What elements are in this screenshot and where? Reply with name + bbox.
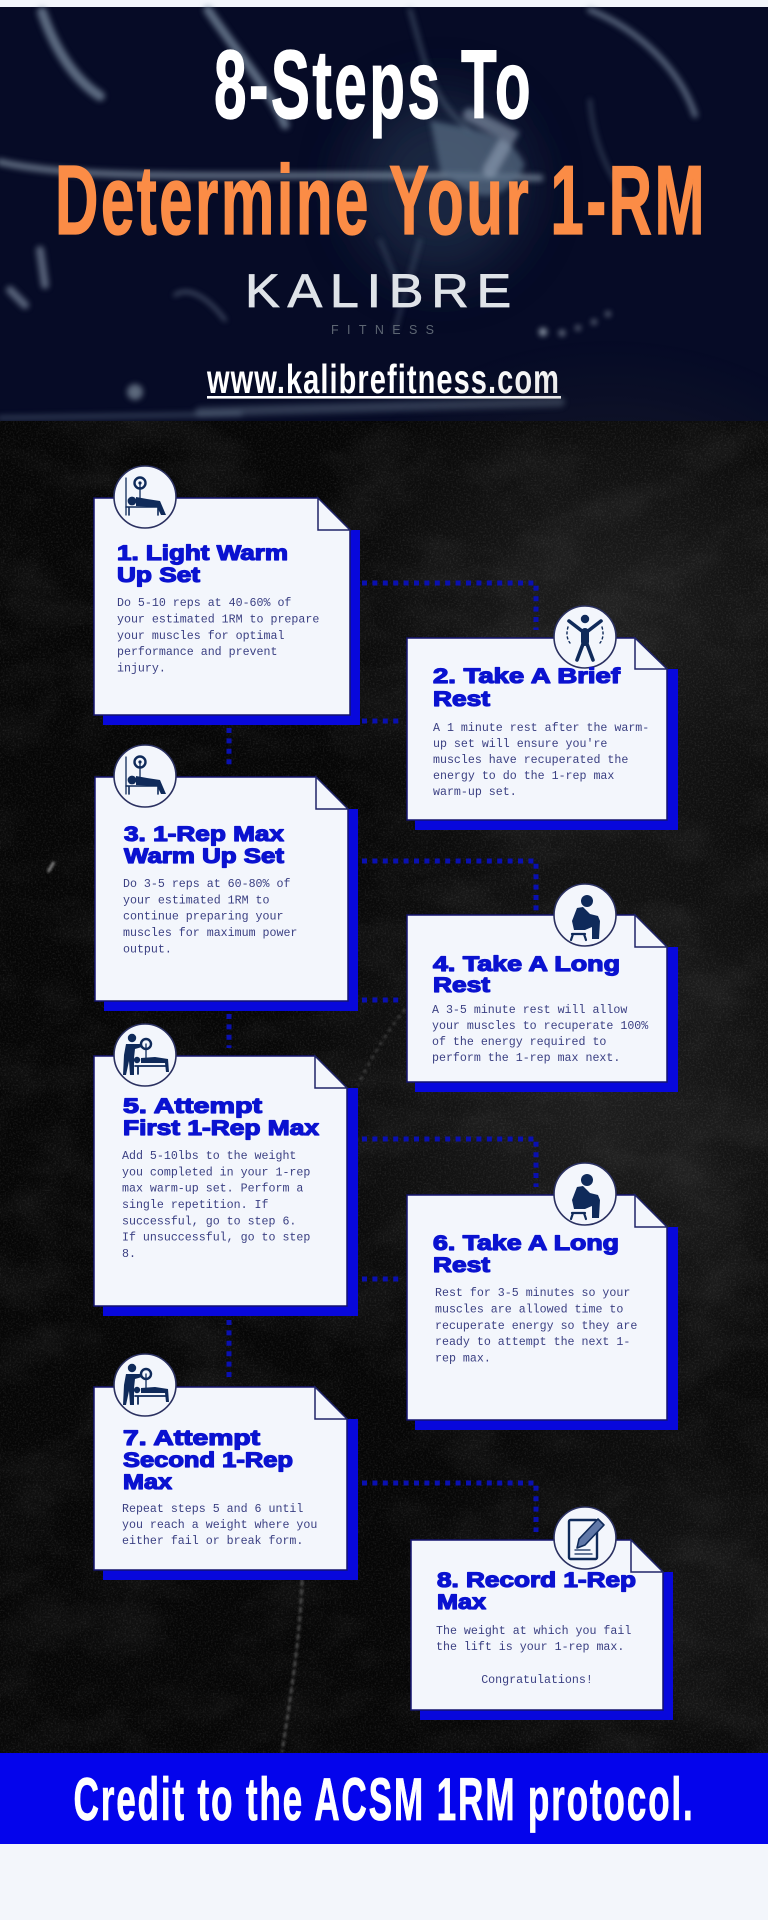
body text: rep max.: [435, 1353, 491, 1366]
top margin strip: [0, 0, 768, 7]
icon: spotted bench press: [114, 1354, 176, 1416]
body text: [122, 1150, 310, 1261]
icon: bench press: [114, 466, 176, 528]
connector: step 1 to 2 lower: [362, 718, 402, 724]
body text: The weight at which you fail: [436, 1625, 631, 1638]
heading: 5. Attempt: [123, 1095, 262, 1118]
heading: 1. Light Warm: [117, 542, 288, 565]
blurred barbell photo: [0, 10, 695, 418]
icon: seated figure: [554, 884, 616, 946]
body text: [123, 878, 297, 956]
heading: Second 1-Rep: [123, 1449, 293, 1472]
connector: step 3 to 4: [362, 861, 536, 912]
heading: [433, 1232, 619, 1277]
panel: step 3: [95, 745, 358, 1011]
body text: muscles are allowed time to: [435, 1303, 623, 1316]
connector: step 1 to 2: [362, 583, 536, 630]
heading: Max: [123, 1471, 172, 1494]
title line 1: 8-Steps To: [214, 30, 533, 139]
website link: www.kalibrefitness.com: [206, 356, 560, 402]
body text: continue preparing your: [123, 911, 283, 924]
body text: Do 3-5 reps at 60-80% of: [123, 878, 290, 891]
heading: [123, 1095, 319, 1140]
body text: you completed in your 1-rep: [122, 1166, 310, 1179]
body text: 8.: [122, 1248, 136, 1261]
panel: step 8: [411, 1507, 673, 1720]
body text: your muscles for optimal: [117, 630, 284, 643]
connector: step 1 to 3: [226, 728, 232, 768]
body text: [117, 597, 319, 676]
panel: step 7: [94, 1354, 358, 1580]
connector: step 3 to 4 lower: [362, 998, 402, 1002]
body text: energy to do the 1-rep max: [433, 770, 614, 783]
header panel: [0, 7, 768, 421]
heading: Rest: [433, 688, 490, 711]
body text: [435, 1287, 637, 1366]
heading: 2. Take A Brief: [433, 665, 621, 688]
body text: If unsuccessful, go to step: [122, 1232, 310, 1245]
heading: [123, 1427, 293, 1494]
heading: Warm Up Set: [124, 845, 284, 868]
heading: 3. 1-Rep Max: [124, 823, 284, 846]
connector: step 5 to 6: [362, 1139, 536, 1187]
body text: [433, 722, 649, 799]
icon: document and pencil: [554, 1507, 616, 1569]
heading: First 1-Rep Max: [123, 1117, 319, 1140]
body text: recuperate energy so they are: [435, 1320, 637, 1333]
panel: step 5: [94, 1024, 358, 1316]
body text: either fail or break form.: [122, 1535, 303, 1548]
heading: Rest: [433, 1254, 490, 1277]
body text: up set will ensure you're: [433, 738, 607, 751]
body text: A 3-5 minute rest will allow: [432, 1004, 627, 1017]
panel: step 6: [407, 1163, 678, 1430]
body text: [122, 1503, 317, 1548]
body text: your estimated 1RM to: [123, 894, 270, 907]
bottom margin: [0, 1844, 768, 1920]
header background: [0, 7, 768, 421]
heading: [433, 665, 621, 711]
heading: Up Set: [117, 564, 200, 587]
body text: output.: [123, 943, 172, 956]
body text: A 1 minute rest after the warm-: [433, 722, 649, 735]
logo subtitle: FITNESS: [331, 323, 434, 337]
connector: step 7 to 8: [362, 1483, 536, 1532]
body text: Congratulations!: [481, 1674, 593, 1687]
dark textured background: [0, 340, 768, 1820]
heading: 7. Attempt: [123, 1427, 260, 1450]
panel: step 1: [94, 466, 360, 725]
soft glow behind the lifter: [355, 95, 525, 275]
footer band: [0, 1753, 768, 1844]
logo: Kalibre: KALIBRE: [245, 264, 519, 317]
icon: spotted bench press: [114, 1024, 176, 1086]
body text: ready to attempt the next 1-: [435, 1336, 630, 1349]
heading: [437, 1569, 636, 1614]
body text: injury.: [117, 663, 166, 676]
heading: Rest: [433, 974, 490, 997]
body text: Add 5-10lbs to the weight: [122, 1150, 296, 1163]
body text: single repetition. If: [122, 1199, 269, 1212]
body text: your estimated 1RM to prepare: [117, 613, 319, 626]
heading: [433, 953, 620, 997]
body text: max warm-up set. Perform a: [122, 1183, 303, 1196]
body text: performance and prevent: [117, 646, 277, 659]
body text: muscles have recuperated the: [433, 754, 628, 767]
panel: step 2: [407, 606, 678, 830]
body text: [436, 1625, 631, 1687]
body text: muscles for maximum power: [123, 927, 297, 940]
heading: 8. Record 1-Rep: [437, 1569, 636, 1592]
heading: 4. Take A Long: [433, 953, 620, 976]
body text: Repeat steps 5 and 6 until: [122, 1503, 303, 1516]
icon: seated figure: [554, 1163, 616, 1225]
icon: stretching figure: [554, 606, 616, 668]
body text: of the energy required to: [432, 1036, 606, 1049]
body text: [432, 1004, 648, 1065]
body text: warm-up set.: [433, 786, 517, 799]
panel: step 4: [407, 884, 678, 1092]
heading: [124, 823, 284, 868]
body text: perform the 1-rep max next.: [432, 1052, 620, 1065]
body text: you reach a weight where you: [122, 1519, 317, 1532]
connector: step 5 to 6 lower: [362, 1276, 402, 1282]
body text: successful, go to step 6.: [122, 1215, 296, 1228]
heading: [117, 542, 288, 587]
connector: step 3 to 5: [226, 1014, 232, 1048]
heading: 6. Take A Long: [433, 1232, 619, 1255]
body text: your muscles to recuperate 100%: [432, 1020, 648, 1033]
heading: Max: [437, 1591, 486, 1614]
body text: the lift is your 1-rep max.: [436, 1641, 624, 1654]
connector: step 5 to 7: [226, 1320, 232, 1378]
body text: Do 5-10 reps at 40-60% of: [117, 597, 291, 610]
body text: Rest for 3-5 minutes so your: [435, 1287, 630, 1300]
icon: bench press: [114, 745, 176, 807]
